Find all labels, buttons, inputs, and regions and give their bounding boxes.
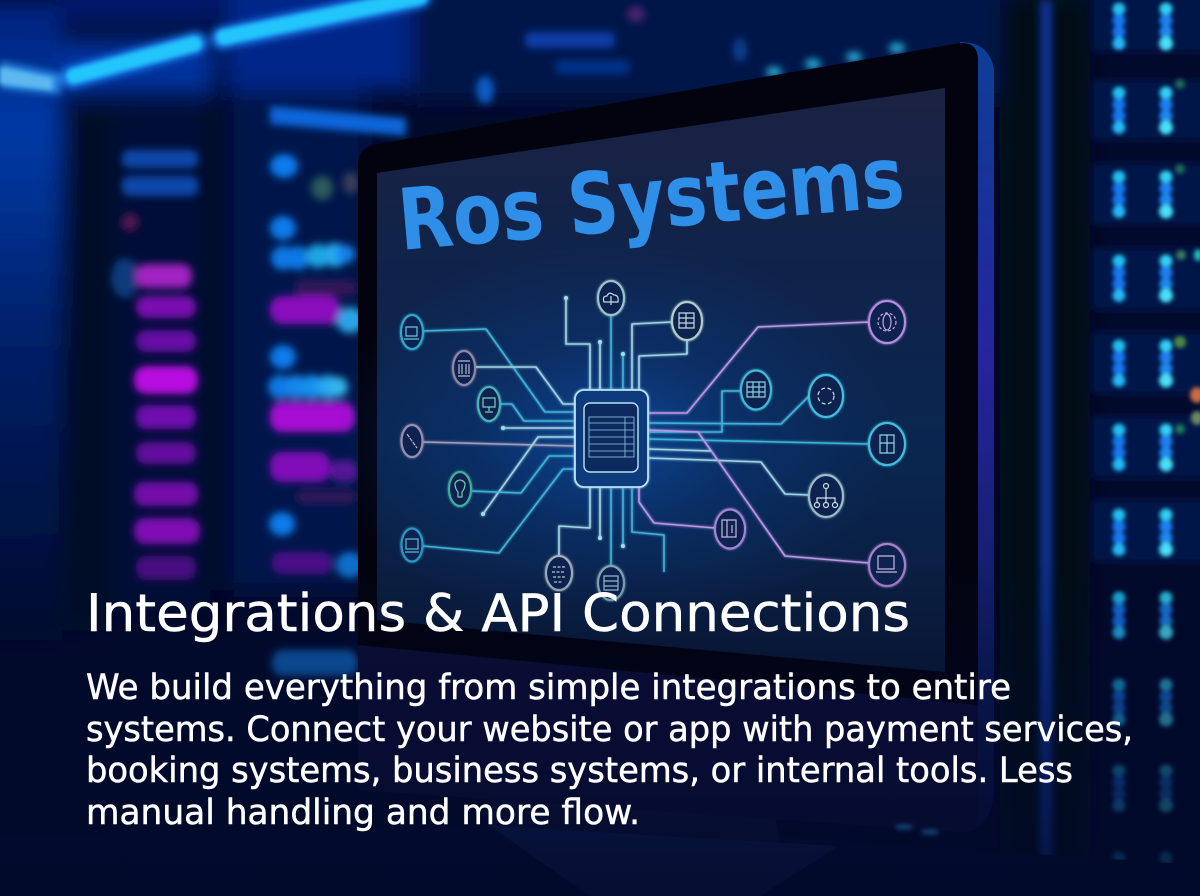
icon: laptop xyxy=(401,315,423,349)
body text: manual handling and more flow. xyxy=(86,793,640,833)
icon: monitor xyxy=(478,387,500,421)
text block xyxy=(86,584,1133,833)
icon: network globe xyxy=(869,301,905,343)
body text: We build everything from simple integrations to entire xyxy=(86,668,1011,708)
icon: cloud xyxy=(598,281,624,315)
icon: bulb xyxy=(449,472,471,506)
monitor bezel xyxy=(358,43,978,705)
blurred rack lights left xyxy=(111,106,406,676)
monitor chin xyxy=(358,625,978,832)
monitor stand xyxy=(490,790,838,896)
icon: link xyxy=(402,425,422,457)
icon: screen bottom left xyxy=(402,528,422,562)
right server racks xyxy=(1040,0,1200,896)
icon: laptop purple xyxy=(869,544,905,586)
body text xyxy=(86,668,1133,833)
connector lines xyxy=(423,298,869,572)
icon: gear xyxy=(809,375,843,417)
terminal dots xyxy=(481,296,625,548)
bottom edge lights xyxy=(895,824,939,835)
central chip xyxy=(575,390,648,487)
monitor screen xyxy=(377,88,945,672)
monitor xyxy=(332,42,994,896)
heading: Integrations & API Connections xyxy=(86,584,910,644)
brand text on screen: Ros Systems xyxy=(394,128,908,271)
monitor right edge xyxy=(960,42,994,832)
icon: org chart xyxy=(809,475,843,517)
network diagram xyxy=(401,281,905,600)
icon: diagram top xyxy=(672,302,702,340)
ceiling light bars xyxy=(0,0,420,94)
icon: calendar xyxy=(741,370,771,410)
body text: booking systems, business systems, or internal tools. Less xyxy=(86,751,1073,791)
icon: qr xyxy=(546,556,572,590)
blurred lights behind monitor top xyxy=(476,6,905,104)
icon: bank xyxy=(453,351,475,385)
icon: phone cards xyxy=(869,423,905,465)
icon: card xyxy=(598,566,624,600)
floor xyxy=(0,825,1200,896)
bottom dark scrim xyxy=(0,560,1200,896)
body text: systems. Connect your website or app with payment services, xyxy=(86,710,1133,750)
icon: document chart xyxy=(715,510,745,548)
